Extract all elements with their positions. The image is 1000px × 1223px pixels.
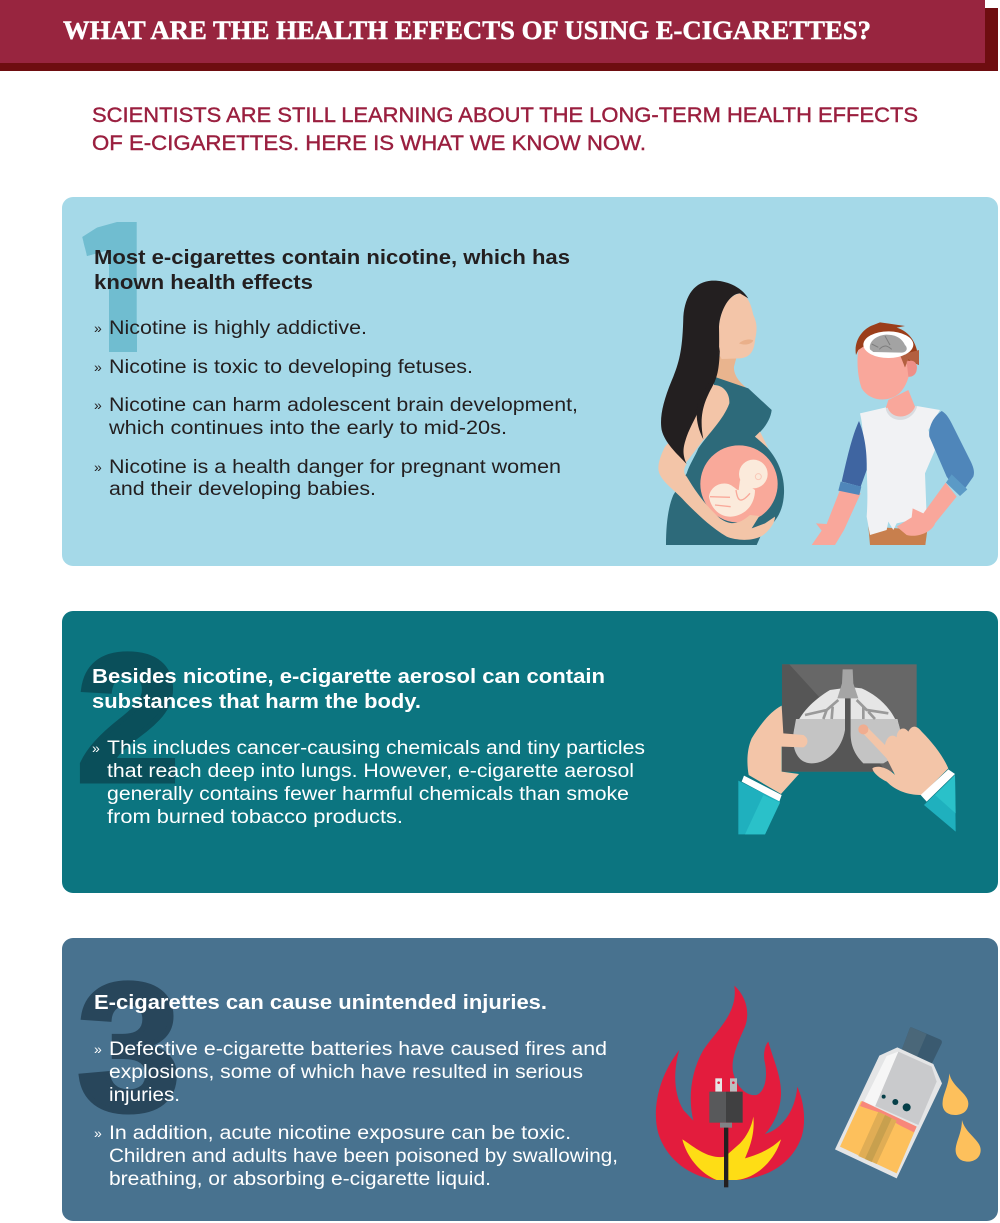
panel 3 bullets: Children and adults have been poisoned by swallowing, (109, 1146, 618, 1167)
panel 2 bullets: » (92, 740, 100, 756)
panel 2 heading (92, 665, 605, 713)
panel 3 bullets: breathing, or absorbing e-cigarette liquid. (109, 1169, 491, 1190)
header banner (0, 0, 998, 71)
illustration: plug on fire (656, 986, 804, 1187)
panel 3: injuries (62, 938, 998, 1221)
panel 1 bullets (94, 318, 578, 500)
panel 3 bullets: injuries. (109, 1085, 180, 1106)
panel 1 bullets: » (94, 359, 102, 375)
panel 2 heading: Besides nicotine, e-cigarette aerosol can contain (92, 665, 605, 688)
panel 2 bullets: from burned tobacco products. (107, 807, 403, 828)
illustration: hands holding lung x-ray (738, 664, 956, 834)
panel 3 heading: E-cigarettes can cause unintended injuries. (94, 991, 547, 1014)
panel 2: aerosol (62, 611, 998, 893)
panel 1 bullets: Nicotine is a health danger for pregnant women (109, 457, 561, 478)
panel 1 bullets: and their developing babies. (109, 479, 376, 500)
panel 3 bullets: In addition, acute nicotine exposure can be toxic. (109, 1123, 571, 1144)
numeral 3: 3 (77, 945, 181, 1149)
illustration: leaking e-liquid bottle (835, 1027, 981, 1178)
panel 1 bullets: » (94, 397, 102, 413)
panel 1: nicotine (62, 187, 998, 566)
intro text: SCIENTISTS ARE STILL LEARNING ABOUT THE LONG-TERM HEALTH EFFECTS (92, 104, 918, 127)
panel 1 bullets: Nicotine is toxic to developing fetuses. (109, 357, 473, 378)
panel 3 bullets (94, 1039, 618, 1190)
panel 1 heading (94, 246, 570, 294)
title: WHAT ARE THE HEALTH EFFECTS OF USING E-CIGARETTES? (63, 16, 871, 45)
panel 1 bullets: which continues into the early to mid-20s. (108, 418, 507, 439)
panel 1 heading: Most e-cigarettes contain nicotine, which has (94, 246, 570, 269)
panel 1 bullets: » (94, 459, 102, 475)
panel 1 bullets: » (94, 320, 102, 336)
panel 3 bullets: » (94, 1041, 102, 1057)
panel 3 bullets: » (94, 1125, 102, 1141)
panel 2 bullets: that reach deep into lungs. However, e-cigarette aerosol (107, 761, 634, 782)
numeral 1: 1 (63, 187, 166, 391)
numeral 2: 2 (76, 616, 180, 820)
illustration: pregnant woman (658, 281, 784, 545)
panel 2 bullets: This includes cancer-causing chemicals and tiny particles (107, 738, 645, 759)
intro text: OF E-CIGARETTES. HERE IS WHAT WE KNOW NOW. (92, 132, 646, 155)
panel 2 bullets (92, 738, 645, 828)
panel 3 bullets: explosions, some of which have resulted in serious (109, 1062, 583, 1083)
intro text (92, 104, 918, 155)
illustration: boy with brain (812, 322, 974, 545)
panel 2 bullets: generally contains fewer harmful chemicals than smoke (107, 784, 629, 805)
panel 1 bullets: Nicotine is highly addictive. (109, 318, 367, 339)
panel 3 bullets: Defective e-cigarette batteries have caused fires and (109, 1039, 607, 1060)
panel 2 heading: substances that harm the body. (92, 690, 421, 713)
panel 1 bullets: Nicotine can harm adolescent brain development, (109, 395, 578, 416)
panel 1 heading: known health effects (94, 271, 313, 294)
